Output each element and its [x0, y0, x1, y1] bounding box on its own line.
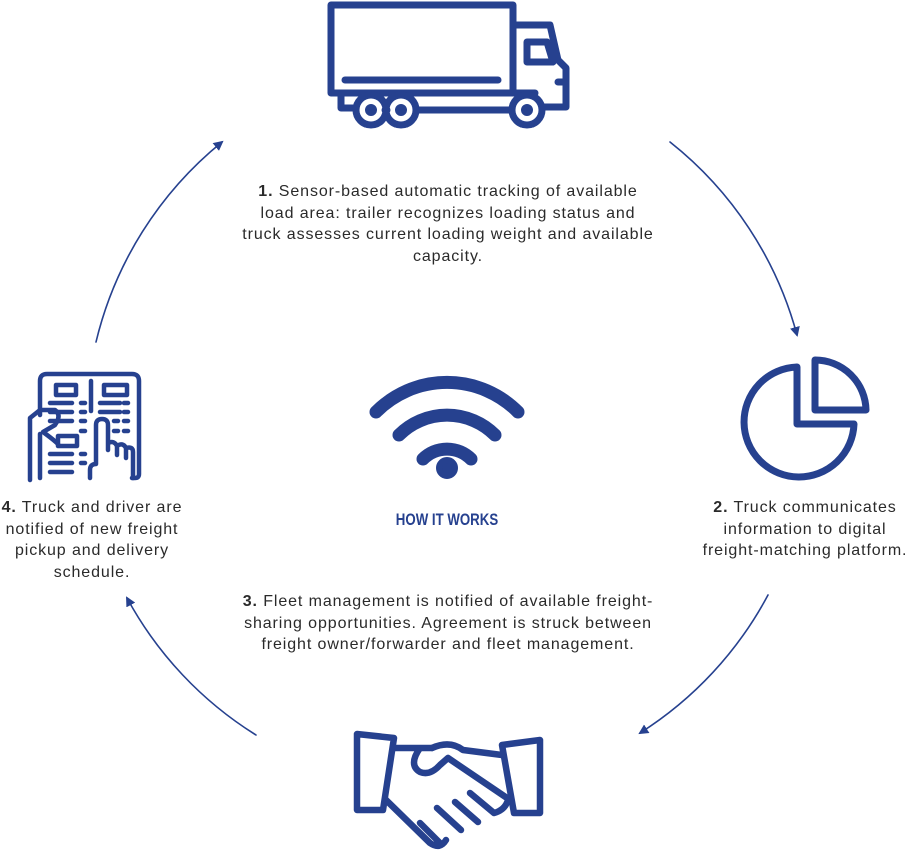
arrow: 3 to 4 [127, 598, 256, 735]
text: step 4: schedule. [54, 564, 130, 580]
text: step 1 [242, 183, 654, 264]
text: step 3: freight owner/forwarder and fleet management. [261, 636, 635, 653]
text: step 4 [2, 499, 182, 580]
text: step 2: freight-matching platform. [703, 542, 907, 559]
heading: how it works: HOW IT WORKS [396, 510, 498, 529]
text: step 2 [702, 499, 907, 559]
text: step 1: load area: trailer recognizes loading status and [261, 204, 635, 222]
text: step 1: 1. Sensor-based automatic tracking of available [258, 183, 638, 200]
text: step 1: capacity. [413, 248, 483, 264]
icon: wifi [376, 382, 518, 476]
icon: handshake [357, 734, 540, 846]
arrow: 1 to 2 [670, 142, 797, 335]
arrow: 4 to 1 [96, 142, 222, 342]
text: step 4: notified of new freight [6, 520, 178, 538]
text: step 2: 2. Truck communicates [713, 499, 897, 516]
icon: pie chart [744, 360, 866, 477]
icon: truck [331, 5, 566, 125]
text: step 4: 4. Truck and driver are [2, 499, 182, 516]
text: step 1: truck assesses current loading weight and available [242, 226, 654, 243]
text: step 2: information to digital [724, 520, 886, 538]
icon: schedule document [30, 374, 139, 480]
arrow: 2 to 3 [640, 595, 768, 733]
text: step 3: 3. Fleet management is notified of available freight- [243, 593, 653, 610]
text: step 4: pickup and delivery [15, 542, 169, 559]
text: step 3: sharing opportunities. Agreement is struck between [244, 614, 652, 632]
text: step 3 [243, 593, 653, 653]
